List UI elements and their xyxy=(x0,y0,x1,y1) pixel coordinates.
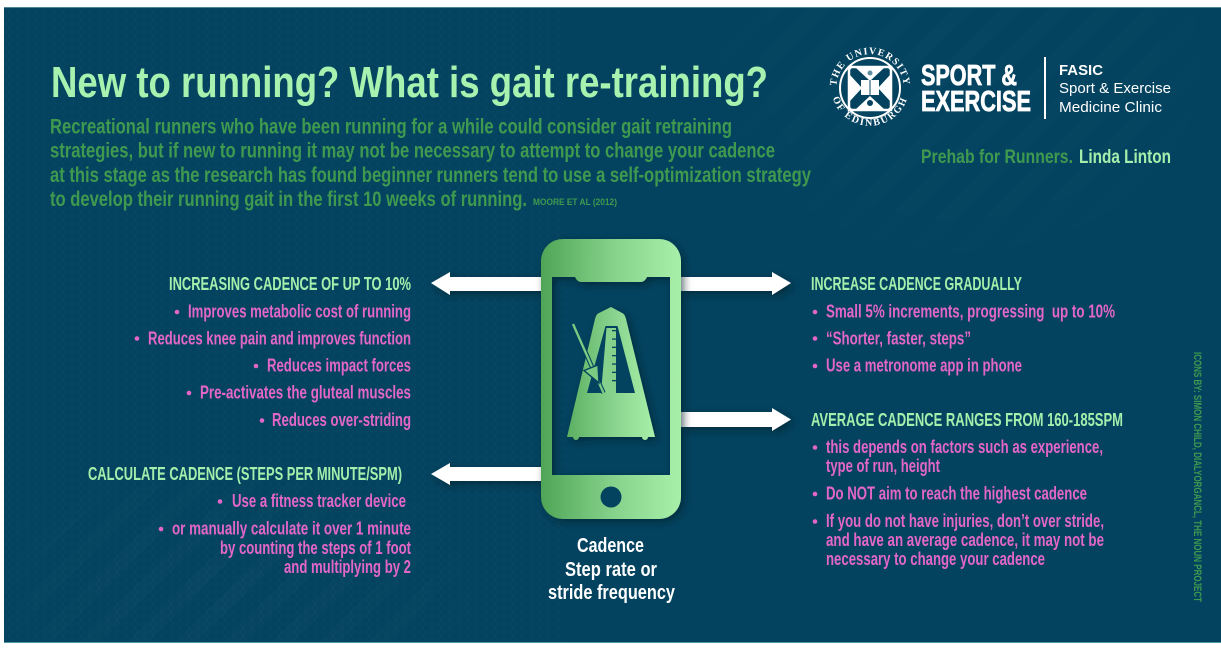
panel: calculate cadence: or manually calculate it over 1 minute xyxy=(172,518,411,538)
byline: Linda Linton xyxy=(1079,147,1171,168)
logo: University of Edinburgh crest xyxy=(830,47,910,126)
panel: average cadence: Do NOT aim to reach the highest cadence xyxy=(826,482,1087,504)
icon: phone xyxy=(541,239,681,519)
caption: cadence: stride frequency xyxy=(548,581,675,604)
arrow: bottom left xyxy=(431,463,541,485)
panel: increasing cadence: Reduces knee pain and improves function xyxy=(148,328,411,348)
panel: average cadence: this depends on factors such as experience, xyxy=(826,436,1103,457)
panel: increasing cadence: Improves metabolic cost of running xyxy=(188,300,411,322)
panel: increase cadence gradually: INCREASE CADENCE GRADUALLY xyxy=(811,274,1022,294)
intro paragraph: Recreational runners who have been running for a while could consider gait retraining xyxy=(50,116,732,138)
panel: average cadence xyxy=(811,410,1123,569)
logo: Sport and Exercise wordmark xyxy=(921,60,1031,118)
clinic name xyxy=(1059,63,1171,116)
logo: University of Edinburgh crest: OF EDINBURGH xyxy=(834,96,907,126)
intro paragraph: to develop their running gait in the first 10 weeks of running. xyxy=(50,188,527,211)
panel: calculate cadence: by counting the steps of 1 foot xyxy=(220,537,411,558)
panel: average cadence: If you do not have injuries, don’t over stride, xyxy=(826,510,1104,531)
icon: metronome xyxy=(567,307,655,440)
logo: Sport and Exercise wordmark: EXERCISE xyxy=(921,86,1031,118)
panel: calculate cadence: and multiplying by 2 xyxy=(284,556,411,577)
arrow: middle right xyxy=(681,408,791,431)
logo: Sport and Exercise wordmark: SPORT & xyxy=(921,60,1017,92)
panel: increase cadence gradually: Use a metronome app in phone xyxy=(826,354,1022,376)
caption: cadence xyxy=(548,534,675,604)
panel: average cadence: and have an average cadence, it may not be xyxy=(826,529,1104,550)
panel: increasing cadence: Pre-activates the gluteal muscles xyxy=(200,382,411,402)
panel: calculate cadence: Use a fitness tracker device xyxy=(232,490,406,511)
title: New to running? What is gait re-training? xyxy=(51,59,768,107)
clinic name: FASIC xyxy=(1059,63,1104,79)
panel: increase cadence gradually: Small 5% increments, progressing up to 10% xyxy=(826,300,1115,322)
caption: cadence: Step rate or xyxy=(565,558,657,581)
panel: increasing cadence: Reduces impact forces xyxy=(267,354,411,376)
panel: average cadence: necessary to change your cadence xyxy=(826,548,1045,569)
panel: increasing cadence xyxy=(135,274,411,430)
panel: increasing cadence: INCREASING CADENCE OF UP TO 10% xyxy=(169,274,411,294)
intro paragraph xyxy=(50,116,811,211)
intro paragraph: MOORE ET AL (2012) xyxy=(533,197,617,208)
panel: average cadence: type of run, height xyxy=(826,455,940,476)
logo divider xyxy=(1044,57,1046,119)
intro paragraph: at this stage as the research has found beginner runners tend to use a self-optimization strategy xyxy=(50,164,811,187)
clinic name: Sport & Exercise xyxy=(1059,80,1171,97)
arrow: top left xyxy=(431,272,541,295)
clinic name: Medicine Clinic xyxy=(1059,99,1163,116)
caption: cadence: Cadence xyxy=(577,534,644,557)
byline: Prehab for Runners. xyxy=(921,147,1073,168)
panel: increase cadence gradually: “Shorter, faster, steps” xyxy=(826,328,971,348)
arrow: top right xyxy=(681,272,791,295)
panel: increasing cadence: Reduces over-striding xyxy=(272,409,411,430)
logo: University of Edinburgh crest: THE UNIVERSITY xyxy=(830,47,910,85)
panel: increase cadence gradually xyxy=(811,274,1115,376)
intro paragraph: strategies, but if new to running it may not be necessary to attempt to change your cadence xyxy=(50,140,775,162)
panel: calculate cadence: CALCULATE CADENCE (STEPS PER MINUTE/SPM) xyxy=(88,464,402,484)
panel: calculate cadence xyxy=(88,464,411,577)
